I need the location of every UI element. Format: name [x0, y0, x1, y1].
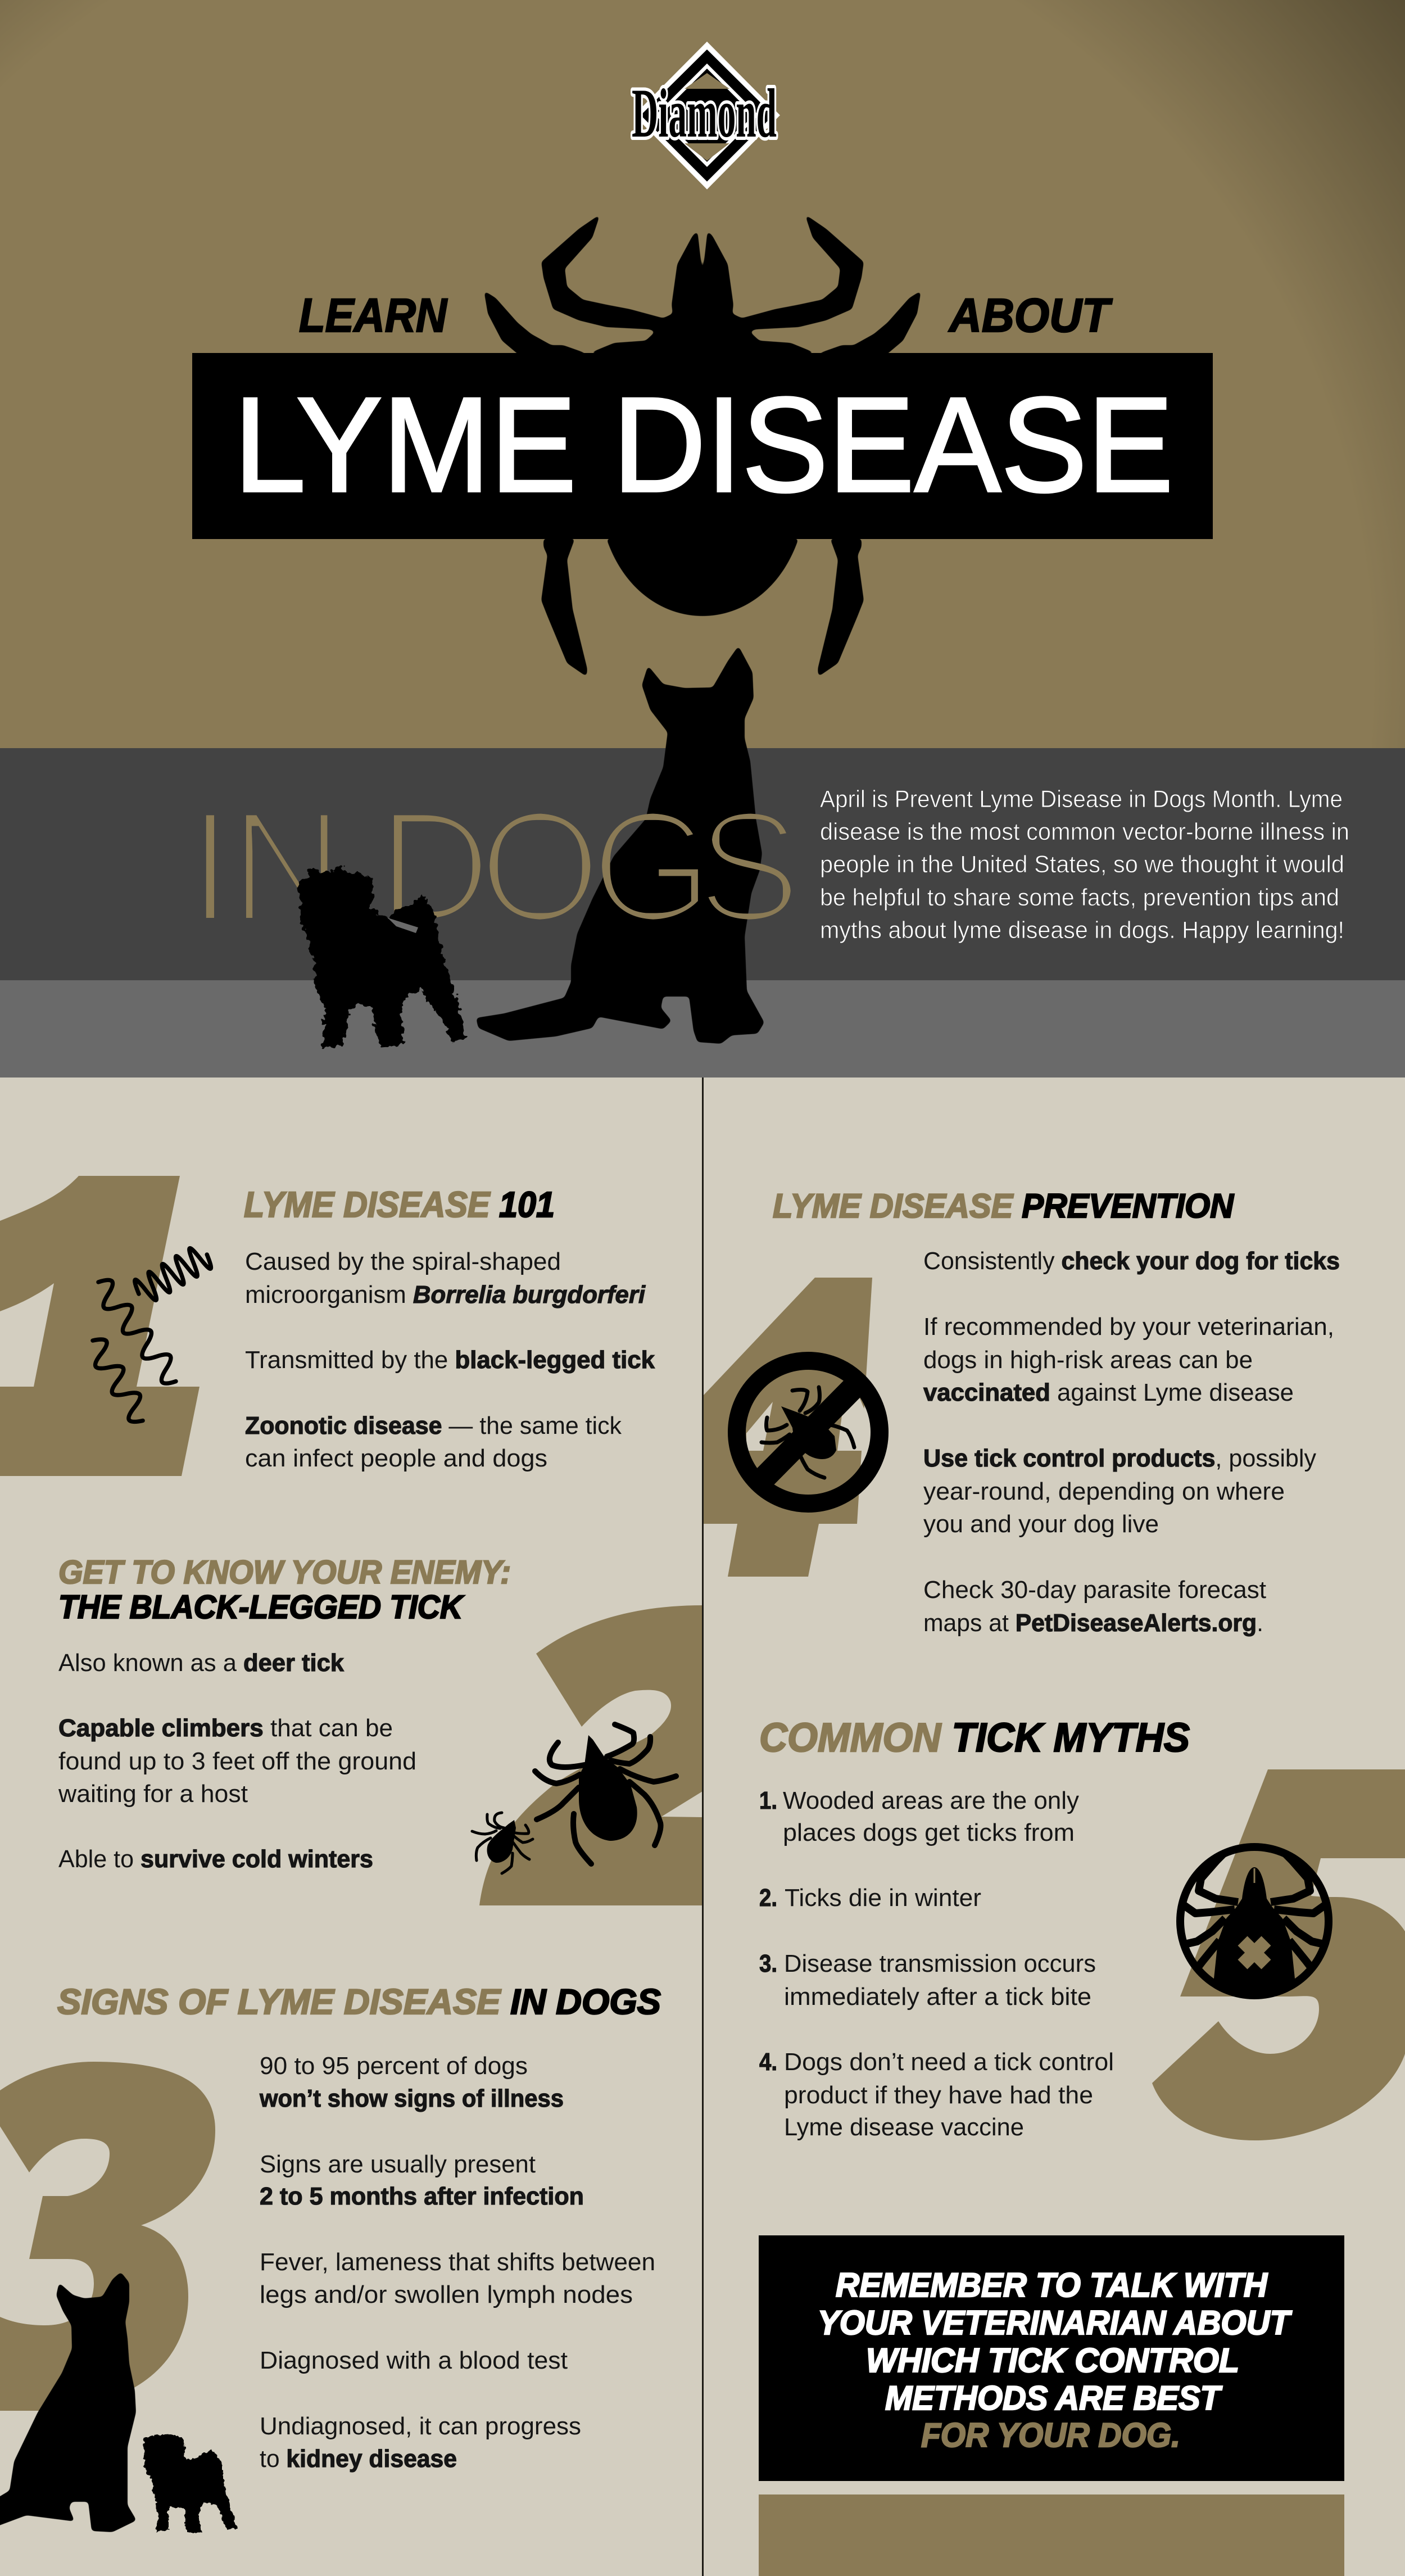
text: facts: can infect people and dogs: [245, 1445, 547, 1472]
icon: small tick: [472, 1813, 533, 1873]
text: myths list: immediately after a tick bite: [784, 1983, 1091, 2011]
text: prevention tips: vaccinated against Lyme disease: [923, 1379, 1294, 1406]
text: myths list: 1.: [759, 1787, 777, 1814]
heading: [58, 1554, 511, 1626]
text: myths list: Dogs don’t need a tick control: [784, 2048, 1114, 2076]
intro paragraph: disease is the most common vector-borne illness in: [820, 818, 1349, 845]
panel: prevention: [704, 1187, 1340, 1637]
intro paragraph: myths about lyme disease in dogs. Happy learning!: [820, 917, 1344, 944]
panel: common tick myths: [759, 1715, 1405, 2141]
text: signs: Diagnosed with a blood test: [260, 2347, 568, 2374]
icon: tick with X in circle: [1177, 1846, 1331, 2001]
text: tick facts: Able to survive cold winters: [58, 1845, 373, 1873]
heading: LYME DISEASE 101: [244, 1184, 555, 1225]
intro paragraph: people in the United States, so we thought it would: [820, 851, 1344, 878]
text: prevention tips: maps at PetDiseaseAlerts.org.: [923, 1609, 1263, 1637]
text: tick facts: found up to 3 feet off the ground: [58, 1747, 416, 1775]
dark band: [0, 748, 1405, 980]
numeral 2: [479, 1605, 703, 1905]
text: facts: Caused by the spiral-shaped: [245, 1248, 561, 1275]
text: myths list: 4.: [759, 2048, 777, 2076]
icon: large tick silhouette: [484, 214, 921, 677]
icon: adult tick: [535, 1724, 676, 1864]
panel: signs of Lyme disease: [0, 1982, 661, 2532]
center divider: [702, 1078, 704, 2576]
callout: talk with your veterinarian: FOR YOUR DOG.: [921, 2416, 1180, 2454]
panel: Lyme disease 101: [0, 1176, 655, 1476]
cream content background: [0, 1078, 1405, 2576]
text: prevention tips: year-round, depending on where: [923, 1478, 1285, 1505]
heading: LEARN: LEARN: [299, 289, 448, 342]
text: tick facts: Capable climbers that can be: [58, 1714, 393, 1742]
icon: big dog silhouette: [476, 646, 764, 1044]
text: facts: microorganism Borrelia burgdorferi: [245, 1281, 646, 1309]
panel: get to know your enemy: [58, 1554, 703, 1905]
text: myths list: Wooded areas are the only: [783, 1787, 1079, 1814]
text: signs: to kidney disease: [260, 2445, 457, 2473]
text: prevention tips: [923, 1247, 1340, 1637]
intro paragraph: be helpful to share some facts, prevention tips and: [820, 884, 1339, 911]
gray band: [0, 980, 1405, 1078]
footer gold panel: [759, 2494, 1344, 2576]
text: prevention tips: you and your dog live: [923, 1510, 1159, 1538]
title: IN DOGS: IN DOGS: [188, 779, 801, 954]
icon: big dog: [0, 2272, 137, 2532]
heading: GET TO KNOW YOUR ENEMY:: [58, 1554, 511, 1591]
gap between dog back and tail: [388, 918, 418, 933]
tick right half: [703, 214, 921, 677]
text: facts: Zoonotic disease — the same tick: [245, 1412, 622, 1439]
heading: COMMON TICK MYTHS: [759, 1715, 1190, 1760]
text: myths list: 3.: [759, 1950, 777, 1977]
text: myths list: Lyme disease vaccine: [784, 2113, 1024, 2141]
title: LYME DISEASE: LYME DISEASE: [234, 369, 1173, 520]
heading: THE BLACK-LEGGED TICK: [58, 1589, 465, 1626]
intro paragraph: April is Prevent Lyme Disease in Dogs Month. Lyme: [820, 786, 1343, 813]
text: facts: [245, 1248, 655, 1472]
text: tick facts: waiting for a host: [58, 1780, 248, 1808]
heading: LYME DISEASE PREVENTION: [773, 1187, 1235, 1225]
text: signs: won’t show signs of illness: [259, 2085, 564, 2112]
numeral 3: [0, 2062, 215, 2411]
intro paragraph: [820, 786, 1349, 944]
numeral 5: [1152, 1769, 1405, 2140]
icon: small dog silhouette: [298, 866, 468, 1048]
text: myths list: Disease transmission occurs: [784, 1950, 1096, 1977]
text: signs: [259, 2052, 655, 2473]
numeral 4: [704, 1278, 872, 1577]
numeral 1: [0, 1176, 200, 1476]
callout: talk with your veterinarian: REMEMBER TO TALK WITH: [836, 2266, 1268, 2304]
text: signs: Fever, lameness that shifts between: [260, 2248, 655, 2276]
Diamond logo: Diamond: [632, 75, 777, 152]
icon: no ticks: [737, 1361, 880, 1504]
text: prevention tips: dogs in high-risk areas can be: [923, 1346, 1253, 1374]
icon: small dog: [143, 2434, 237, 2532]
text: signs: legs and/or swollen lymph nodes: [260, 2281, 633, 2308]
text: myths list: 2.: [759, 1884, 777, 1912]
text: prevention tips: Consistently check your dog for ticks: [923, 1247, 1340, 1275]
text: signs: Signs are usually present: [260, 2151, 536, 2178]
text: signs: 90 to 95 percent of dogs: [260, 2052, 528, 2080]
tick left half: [484, 214, 703, 677]
text: facts: Transmitted by the black-legged tick: [245, 1346, 655, 1374]
text: tick facts: [58, 1649, 416, 1873]
callout: talk with your veterinarian: YOUR VETERINARIAN ABOUT: [818, 2304, 1292, 2342]
text: prevention tips: If recommended by your veterinarian,: [923, 1313, 1334, 1341]
heading: SIGNS OF LYME DISEASE IN DOGS: [57, 1982, 661, 2022]
text: myths list: product if they have had the: [784, 2081, 1093, 2109]
title banner: [192, 353, 1213, 539]
header background: [0, 0, 1405, 749]
text: myths list: [759, 1787, 1114, 2141]
text: signs: Undiagnosed, it can progress: [260, 2412, 581, 2440]
text: prevention tips: Check 30-day parasite forecast: [923, 1576, 1266, 1604]
callout: talk with your veterinarian: WHICH TICK CONTROL: [866, 2342, 1239, 2379]
callout: talk with your veterinarian: [759, 2235, 1344, 2481]
callout: talk with your veterinarian: METHODS ARE BEST: [885, 2379, 1222, 2417]
text: myths list: places dogs get ticks from: [783, 1819, 1075, 1846]
text: myths list: Ticks die in winter: [785, 1884, 981, 1912]
text: signs: 2 to 5 months after infection: [260, 2183, 584, 2210]
text: tick facts: Also known as a deer tick: [58, 1649, 345, 1677]
icon: spirochetes: [83, 1242, 214, 1427]
text: prevention tips: Use tick control products, possibly: [923, 1445, 1316, 1472]
Diamond logo: [632, 42, 780, 189]
heading: ABOUT: ABOUT: [948, 289, 1113, 342]
